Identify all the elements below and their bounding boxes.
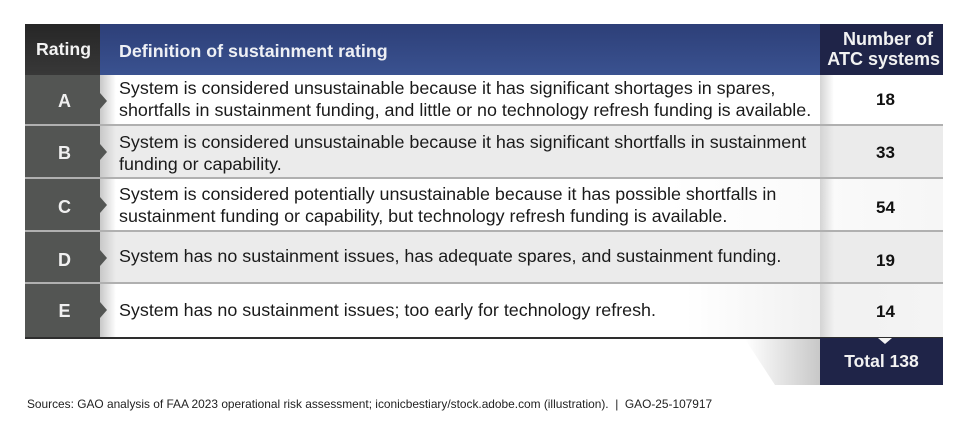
count A: 18 — [876, 90, 895, 109]
definition E: System has no sustainment issues; too early for technology refresh. — [119, 300, 656, 320]
definition C: System is considered potentially unsustainable because it has possible shortfalls in — [119, 184, 776, 204]
definition D: System has no sustainment issues, has adequate spares, and sustainment funding. — [119, 246, 781, 266]
row B — [25, 126, 943, 179]
row D — [25, 232, 943, 284]
definition C: sustainment funding or capability, but technology refresh funding is available. — [119, 206, 727, 226]
header: number of ATC systems: ATC systems — [827, 49, 940, 69]
arrow A — [100, 93, 107, 109]
decorative shadow — [756, 339, 820, 385]
definition B — [119, 132, 806, 174]
arrow D — [100, 250, 107, 266]
source note: Sources: GAO analysis of FAA 2023 operational risk assessment; iconicbestiary/stock.adobe.com (illustration). | GAO-25-107917 — [27, 397, 712, 411]
rating A: A — [58, 91, 71, 111]
row E — [25, 284, 943, 337]
arrow E — [100, 302, 107, 318]
rating E: E — [58, 301, 70, 321]
total box — [820, 338, 943, 385]
table — [25, 24, 943, 385]
definition B: System is considered unsustainable because it has significant shortfalls in sustainment — [119, 132, 806, 152]
count B: 33 — [876, 143, 895, 162]
header: definition: Definition of sustainment rating — [119, 41, 388, 61]
total box: Total 138 — [844, 351, 919, 371]
arrow C — [100, 197, 107, 213]
header: rating — [25, 24, 100, 75]
count E: 14 — [876, 302, 895, 321]
count D: 19 — [876, 251, 895, 270]
row A — [25, 75, 943, 126]
arrow B — [100, 144, 107, 160]
definition A: shortfalls in sustainment funding, and little or no technology refresh funding is available. — [119, 100, 811, 120]
row C — [25, 179, 943, 232]
rating D: D — [58, 250, 71, 270]
definition B: funding or capability. — [119, 154, 282, 174]
header: rating: Rating — [36, 39, 91, 59]
count C: 54 — [876, 198, 895, 217]
rating C: C — [58, 197, 71, 217]
definition A — [119, 78, 811, 120]
header: definition — [100, 24, 820, 75]
definition C — [119, 184, 776, 226]
definition A: System is considered unsustainable because it has significant shortages in spares, — [119, 78, 775, 98]
rating B: B — [58, 143, 71, 163]
header: number of ATC systems: Number of — [843, 29, 933, 49]
header: number of ATC systems — [820, 24, 943, 75]
total pointer — [878, 338, 892, 344]
